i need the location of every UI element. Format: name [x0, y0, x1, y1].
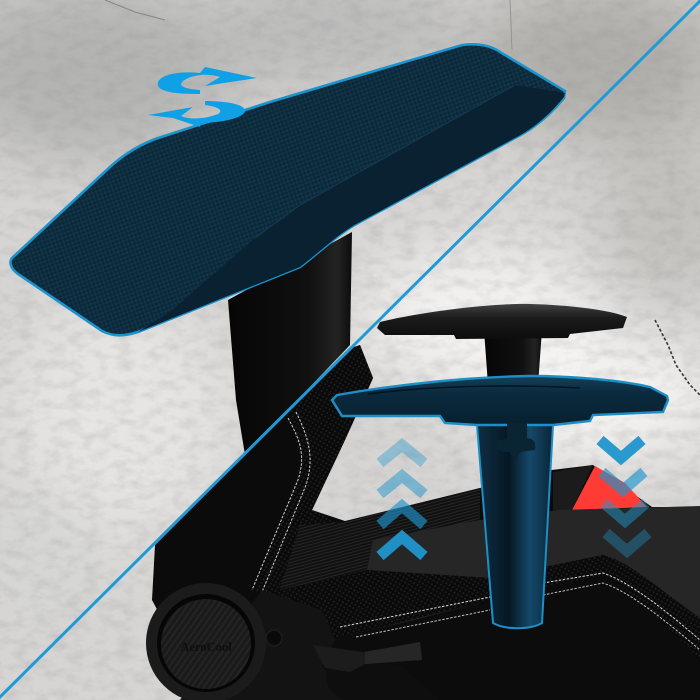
height lever [496, 423, 535, 461]
seat red accent [572, 466, 647, 510]
upper arrow [158, 67, 257, 94]
chair back side [152, 345, 700, 700]
chair back mesh panel [256, 345, 380, 600]
upper black armrest [377, 304, 627, 385]
blue armrest [332, 376, 668, 628]
armrest lower right facet [138, 85, 565, 332]
chevrons up [380, 445, 424, 556]
recline plate [180, 590, 345, 700]
blue armrest pad [332, 376, 668, 425]
seat panel [367, 506, 700, 618]
black armrest pad [377, 304, 627, 339]
rotation arrows [148, 67, 257, 127]
chevrons down [600, 440, 648, 551]
chair back stitching [252, 412, 310, 592]
armrest pad [10, 44, 565, 335]
armrest post [228, 232, 352, 455]
seat cushion front [333, 604, 480, 699]
pad groove [368, 386, 580, 394]
chair lower-right half [146, 345, 700, 700]
seat stitching [340, 573, 700, 640]
recline handle [313, 642, 422, 672]
armrest facet highlight [255, 85, 515, 238]
bracket bolt [266, 630, 282, 646]
seat cushion mesh band [270, 555, 700, 660]
seat dark edge [553, 465, 593, 512]
big armrest upper-left half [10, 44, 565, 455]
blue armrest post [477, 425, 553, 628]
pivot wheel cover [146, 583, 255, 698]
seat side [280, 488, 480, 628]
black armrest post [484, 330, 542, 385]
lower arrow [148, 101, 245, 127]
logo text: AeroCool [180, 640, 232, 654]
